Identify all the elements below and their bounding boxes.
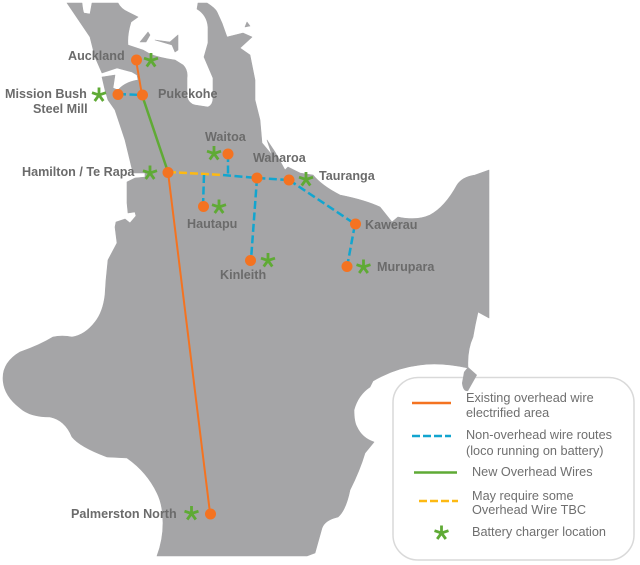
legend: may require some overhead wire: Overhead Wire TBC	[472, 503, 586, 517]
legend: battery charger location: Battery charger location	[472, 525, 606, 539]
location labels: Mission Bush	[5, 87, 87, 101]
panel: legend	[393, 378, 634, 560]
map: east cape tail over legend border	[462, 367, 477, 391]
legend: non-overhead wire routes	[412, 428, 612, 458]
route: non-overhead battery routes	[118, 94, 355, 267]
location labels: Hamilton / Te Rapa	[22, 165, 135, 179]
location labels: Murupara	[377, 260, 435, 274]
location labels: Kinleith	[220, 268, 266, 282]
location labels: Steel Mill	[33, 102, 88, 116]
location labels: Tauranga	[319, 169, 376, 183]
route: may require some overhead wire	[168, 172, 223, 175]
map: small islands	[140, 32, 150, 42]
location labels: Auckland	[68, 49, 125, 63]
location labels: Hautapu	[187, 217, 237, 231]
location labels: Waitoa	[205, 130, 247, 144]
map: North Island landmass	[3, 3, 489, 556]
legend: non-overhead wire routes: (loco running on battery)	[466, 444, 604, 458]
station dots	[112, 54, 361, 520]
route: existing overhead wire	[136, 60, 210, 513]
legend: non-overhead wire routes: Non-overhead wire routes	[466, 428, 612, 442]
location labels: Waharoa	[253, 151, 307, 165]
legend: existing overhead wire	[412, 391, 594, 420]
route: new overhead wires	[142, 95, 168, 172]
legend: may require some overhead wire	[419, 489, 586, 517]
location labels: Pukekohe	[158, 87, 218, 101]
location labels: Kawerau	[365, 218, 418, 232]
legend: existing overhead wire: electrified area	[466, 406, 550, 420]
legend: new overhead wires: New Overhead Wires	[472, 465, 593, 479]
battery charger markers	[92, 53, 370, 520]
location labels: Palmerston North	[71, 507, 177, 521]
location labels	[5, 49, 435, 521]
legend: existing overhead wire: Existing overhead wire	[466, 391, 594, 405]
legend: may require some overhead wire: May require some	[472, 489, 574, 503]
